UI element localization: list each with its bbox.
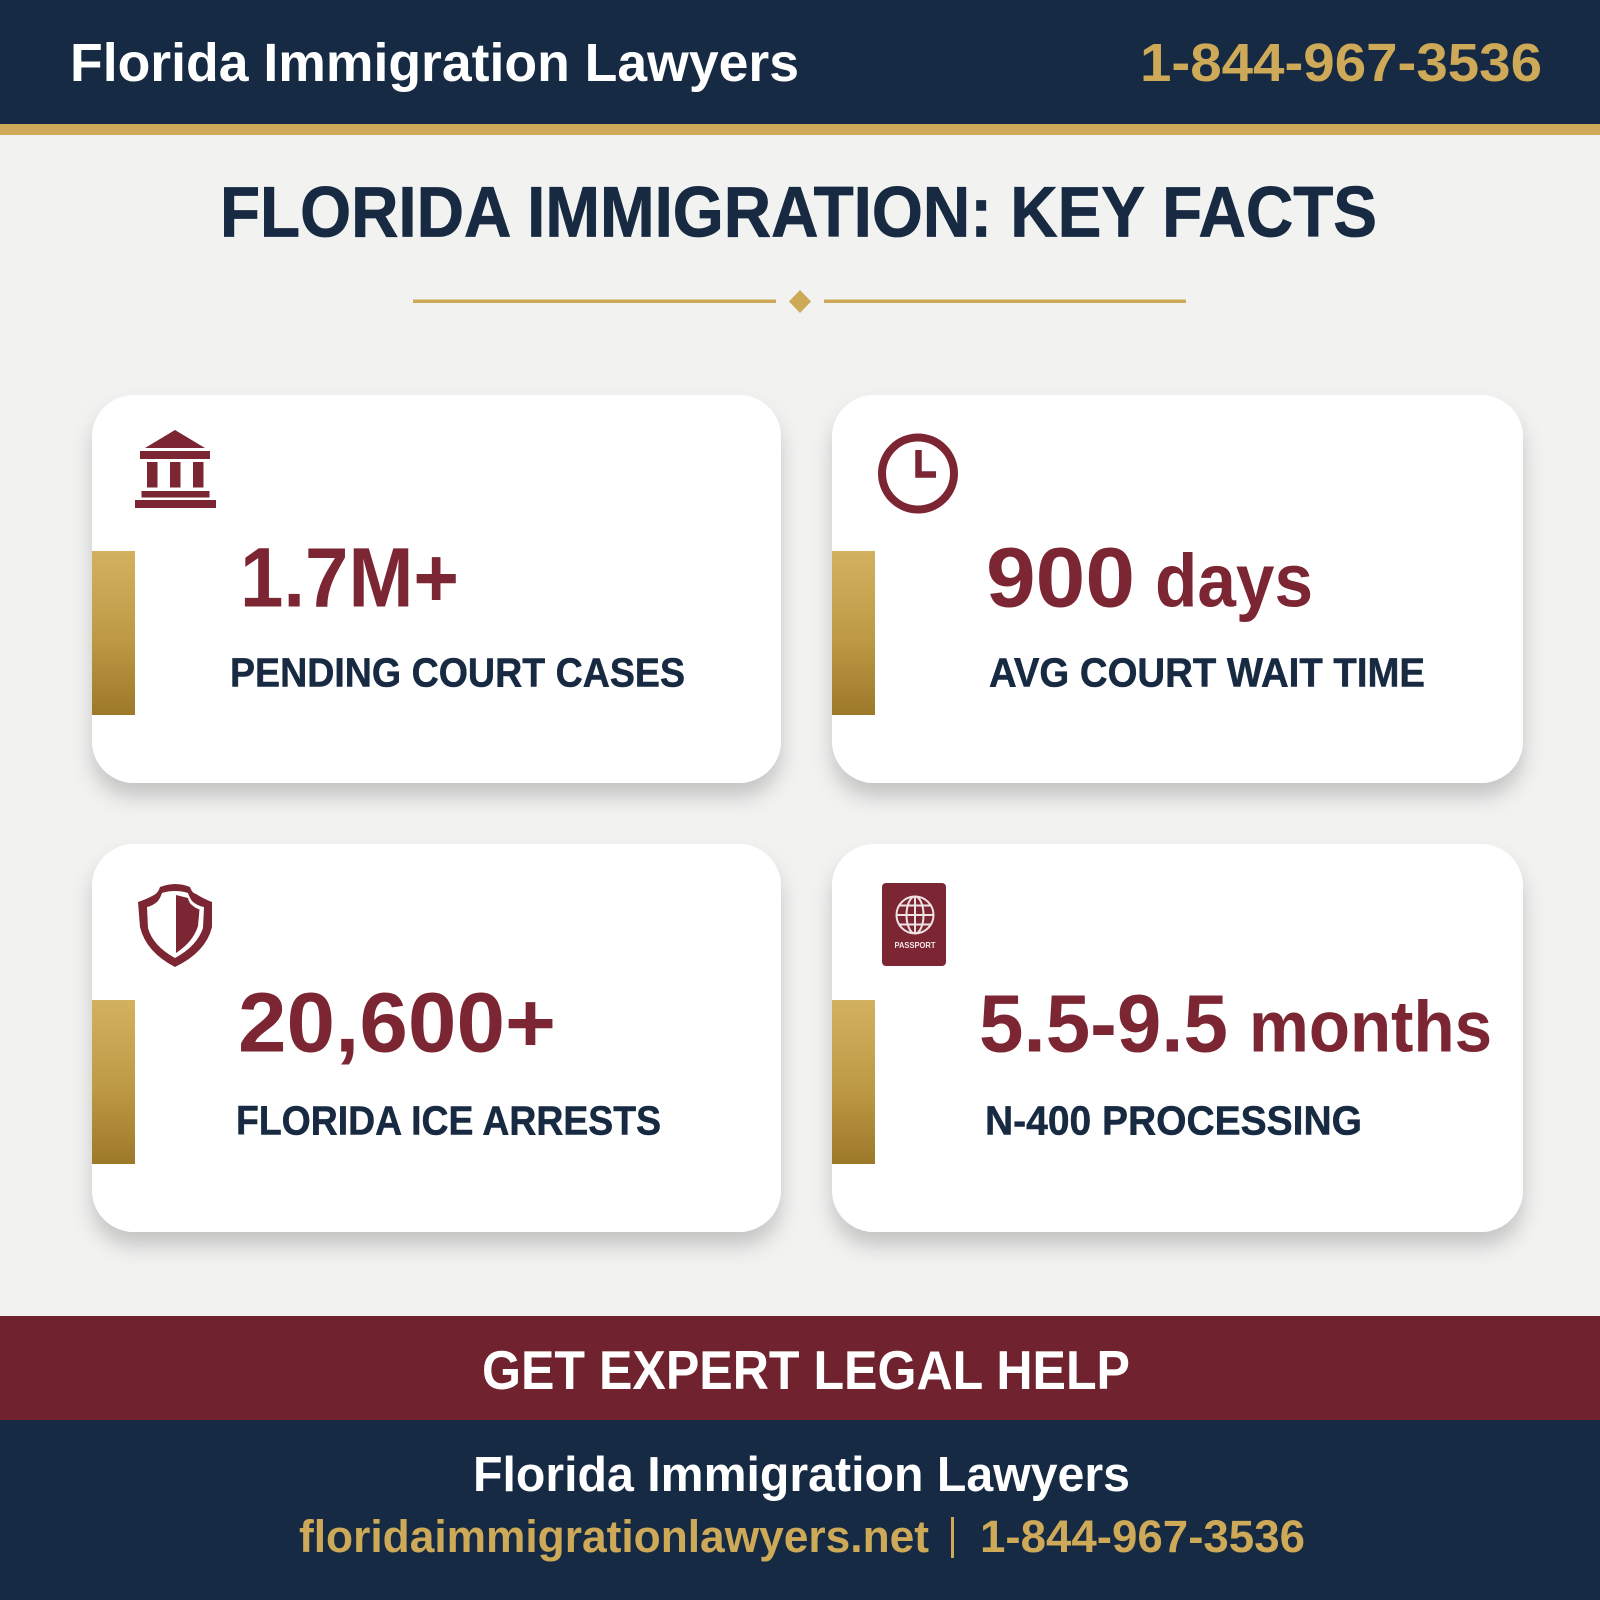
stat value: 1.7M+: [240, 530, 459, 624]
stat label: N-400 PROCESSING: [985, 1098, 1362, 1144]
call to action band: [0, 1316, 1600, 1420]
header phone number: 1-844-967-3536: [1140, 33, 1542, 93]
footer: [0, 1420, 1600, 1600]
icon: courthouse: [135, 430, 216, 508]
footer separator: [951, 1517, 954, 1558]
stat label: PENDING COURT CASES: [230, 650, 685, 696]
stat value: days: [1155, 538, 1313, 622]
call to action band: GET EXPERT LEGAL HELP: [482, 1339, 1130, 1401]
stat value: 5.5-9.5: [979, 978, 1228, 1070]
stat value: months: [1249, 988, 1492, 1068]
header firm name: Florida Immigration Lawyers: [70, 33, 799, 93]
header bar: [0, 0, 1600, 135]
footer phone number: 1-844-967-3536: [980, 1511, 1305, 1562]
panel: n-400 processing: [832, 844, 1523, 1232]
stat label: FLORIDA ICE ARRESTS: [236, 1098, 661, 1144]
stat value: 20,600+: [238, 976, 556, 1070]
stat value: [986, 530, 1313, 624]
gold accent bar: [92, 551, 135, 715]
panel: pending court cases: [92, 395, 781, 783]
stat label: AVG COURT WAIT TIME: [989, 650, 1425, 696]
gold accent bar: [92, 1000, 135, 1164]
title divider with diamond: [413, 290, 1186, 313]
stat value: 900: [986, 530, 1135, 624]
title: FLORIDA IMMIGRATION: KEY FACTS: [220, 174, 1377, 252]
icon: shield: [138, 884, 212, 967]
footer firm name: Florida Immigration Lawyers: [473, 1448, 1130, 1502]
icon: passport: PASSPORT: [894, 940, 936, 950]
icon: passport: [882, 883, 946, 966]
panel: florida ice arrests: [92, 844, 781, 1232]
footer website: floridaimmigrationlawyers.net: [299, 1511, 929, 1562]
stat value: [979, 978, 1492, 1070]
gold accent bar: [832, 551, 875, 715]
gold accent bar: [832, 1000, 875, 1164]
icon: clock: [882, 438, 954, 510]
panel: court wait time: [832, 395, 1523, 783]
